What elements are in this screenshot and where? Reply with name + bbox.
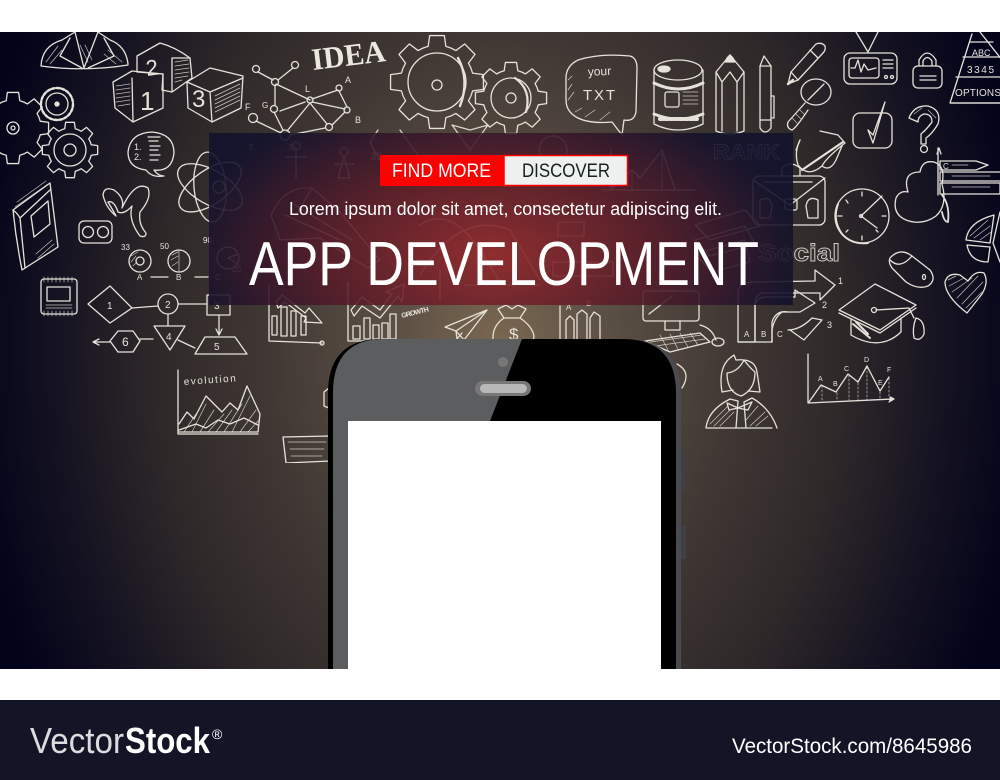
icon: partial object beside phone — [324, 364, 686, 408]
icon: rising bar chart — [348, 282, 404, 341]
icon: network nodes: F — [245, 102, 251, 112]
icon: curled three symbol — [103, 186, 149, 237]
icon: arrow bar chart: C — [943, 162, 949, 171]
footer logo: Stock — [125, 720, 211, 761]
icon: branching arrows ABC: 2 — [822, 300, 827, 310]
smartphone — [328, 339, 686, 669]
doodle illustrations — [0, 32, 1000, 463]
icon: percentage donuts: 33 — [121, 243, 130, 252]
button: find more — [380, 155, 505, 186]
footer bar — [0, 700, 1000, 780]
icon: briefcase — [753, 164, 825, 225]
icon: monitor and keyboard — [643, 291, 724, 352]
icon: closed book — [13, 181, 58, 270]
icon: numbered cubes — [113, 43, 243, 122]
doodle text: RANK: RANK — [713, 141, 780, 164]
icon: percentage donuts — [121, 236, 241, 282]
icon: network nodes: G — [262, 101, 268, 110]
doodle layer — [0, 32, 1000, 463]
icon: padlock — [913, 53, 942, 88]
dim doodles under banner: 35 — [370, 151, 382, 163]
icon: hatched heart — [945, 272, 986, 313]
phone glossy reflection — [333, 339, 661, 669]
icon: diagonal pencil — [788, 43, 825, 84]
flowchart doodle: 5 — [214, 342, 220, 353]
icon: note strip — [283, 436, 330, 463]
icon: A to F line chart — [808, 354, 894, 403]
icon: question mark — [909, 106, 939, 152]
icon: glasses — [796, 131, 845, 172]
icon: network nodes: A — [345, 75, 351, 85]
button: discover — [504, 156, 628, 186]
icon: percentage donuts: C — [215, 273, 221, 282]
icon: 3D bars: A — [566, 303, 572, 312]
icon: evolution area chart — [178, 370, 260, 434]
phone camera — [498, 357, 508, 367]
icon: percentage donuts: A — [137, 273, 143, 282]
button: find more: FIND MORE — [392, 161, 491, 182]
icon: branching arrows ABC: 1 — [838, 276, 843, 286]
icon: list speech bubble: 1. — [134, 142, 142, 152]
icon: check box — [853, 102, 892, 148]
flowchart doodle: 2 — [165, 300, 171, 311]
icon: tin can — [654, 60, 703, 130]
footer image id: VectorStock.com/8645986 — [732, 735, 972, 758]
icon: numbered cubes: 3 — [192, 86, 205, 113]
icon: your text speech box — [566, 55, 637, 135]
icon: pencil — [716, 55, 744, 134]
banner panel — [209, 133, 793, 305]
icon: your text speech box: TXT — [583, 87, 615, 104]
icon: options pyramid — [950, 32, 1000, 103]
icon: network nodes: D — [289, 143, 295, 152]
button: discover: DISCOVER — [522, 161, 610, 182]
flowchart doodle: 3 — [214, 301, 220, 312]
icon: network nodes — [245, 62, 361, 152]
icon: cloud — [895, 162, 948, 222]
footer logo: ® — [212, 726, 223, 742]
icon: microchip — [41, 277, 77, 316]
icon: percentage donuts: B — [176, 273, 181, 282]
icon: network nodes: E — [249, 143, 254, 152]
phone speaker — [475, 381, 531, 396]
icon: percentage donuts: 50 — [160, 242, 169, 251]
icon: 3D bars — [560, 299, 608, 340]
subtitle: Lorem ipsum dolor sit amet, consectetur adipiscing elit. — [289, 199, 722, 219]
icon: magnifier — [788, 79, 831, 130]
icon: branching arrows ABC — [738, 270, 843, 342]
icon: A to F line chart: A — [818, 376, 823, 383]
title: APP DEVELOPMENT — [249, 230, 759, 299]
icon: branching arrows ABC: 3 — [827, 320, 832, 330]
icon: branching arrows ABC: A — [744, 330, 750, 339]
icon: percentage donuts: 90 — [203, 236, 212, 245]
icon: network nodes: L — [305, 84, 310, 94]
icon: A to F line chart: F — [887, 367, 891, 374]
icon: money bag — [493, 305, 534, 345]
icon: evolution area chart: evolution — [183, 373, 236, 388]
phone body — [328, 339, 681, 669]
icon: numbered cubes: 1 — [140, 86, 154, 116]
icon: falling bar chart — [269, 285, 324, 345]
icon: graduation cap — [839, 284, 924, 343]
icon: A to F line chart: D — [864, 357, 869, 364]
icon: branching arrows ABC: B — [761, 330, 766, 339]
icon: atom — [176, 152, 243, 222]
footer logo: Vector — [30, 720, 124, 761]
icon: money bag: $ — [509, 325, 519, 344]
icon: options pyramid: ABC — [972, 48, 991, 58]
icon: TV with waveform — [844, 32, 897, 84]
doodle text: Social: Social — [758, 240, 840, 267]
icon: large gears — [391, 36, 547, 134]
icon: GO tag — [79, 221, 112, 243]
icon: numbered cubes: 2 — [144, 54, 160, 81]
icon: pie chart — [966, 212, 1000, 262]
icon: A to F line chart: C — [844, 366, 849, 373]
phone side buttons — [681, 450, 686, 559]
icon: businessman suit — [41, 32, 128, 69]
icon: branching arrows ABC: C — [777, 330, 783, 339]
flowchart doodle: 4 — [166, 332, 172, 343]
icon: list speech bubble: 2. — [134, 152, 142, 162]
icon: A to F line chart: B — [833, 381, 838, 388]
doodle text: growth: GROWTH — [401, 306, 430, 320]
doodle text: IDEA: IDEA — [310, 33, 388, 77]
dim doodles under banner — [271, 125, 760, 300]
phone black face — [328, 339, 676, 669]
icon: arrow bar chart — [937, 148, 1000, 195]
icon: three gears — [0, 88, 98, 178]
flowchart doodle — [88, 286, 247, 354]
icon: list speech bubble — [128, 132, 174, 176]
icon: businesswoman — [706, 355, 777, 428]
icon: wall clock — [835, 189, 889, 243]
icon: percentage donuts: 20 — [232, 265, 241, 274]
flowchart doodle: 1 — [107, 301, 113, 312]
icon: network nodes: B — [355, 115, 361, 125]
icon: 3D bars: B — [586, 299, 591, 308]
icon: options pyramid: OPTIONS — [955, 88, 1000, 99]
icon: A to F line chart: E — [878, 380, 883, 387]
icon: paper plane — [445, 310, 487, 340]
footer logo — [30, 720, 223, 761]
icon: computer mouse — [889, 252, 933, 287]
phone screen — [348, 421, 661, 669]
flowchart doodle: 6 — [122, 335, 129, 349]
icon: ball pen — [760, 56, 774, 132]
icon: options pyramid: 3345 — [967, 65, 994, 76]
icon: your text speech box: your — [587, 64, 611, 79]
